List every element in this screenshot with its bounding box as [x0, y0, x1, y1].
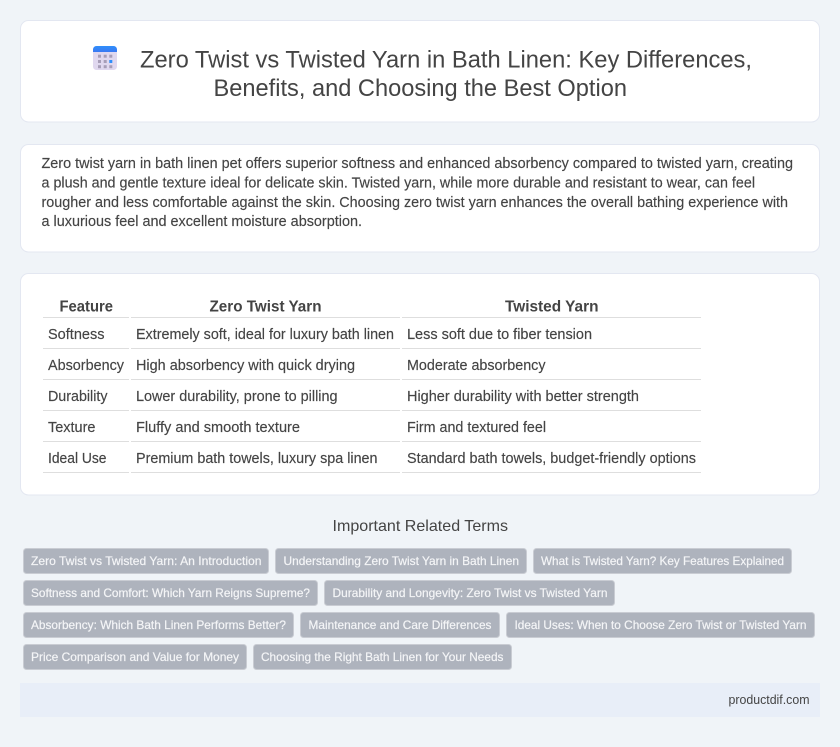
row: durability: Higher durability with better strength	[407, 389, 639, 405]
paragraph text: a plush and gentle texture ideal for delicate skin. Twisted yarn, while more durable and resistant to wear, can feel	[42, 176, 755, 192]
row: ideal use: Standard bath towels, budget-friendly options	[407, 451, 696, 467]
row: ideal use: Premium bath towels, luxury spa linen	[136, 451, 378, 467]
tag	[24, 612, 294, 638]
row: ideal use: Ideal Use	[48, 451, 106, 467]
tag	[24, 580, 318, 606]
table header: Twisted Yarn	[505, 298, 598, 316]
tag: Understanding Zero Twist Yarn in Bath Linen	[284, 554, 519, 568]
table header: Feature	[60, 298, 113, 316]
table header	[43, 298, 701, 318]
tag: Choosing the Right Bath Linen for Your Needs	[261, 650, 504, 664]
tag	[324, 580, 614, 606]
row: absorbency	[43, 358, 701, 380]
tag	[534, 548, 792, 574]
tag: Zero Twist vs Twisted Yarn: An Introduction	[31, 554, 262, 568]
tag	[24, 548, 268, 574]
row: durability	[43, 389, 701, 411]
tag: Maintenance and Care Differences	[308, 618, 492, 632]
icon: calendar	[93, 46, 117, 70]
title: Zero Twist vs Twisted Yarn in Bath Linen: Key Differences,	[140, 46, 752, 74]
tag: Ideal Uses: When to Choose Zero Twist or Twisted Yarn	[514, 618, 806, 632]
header panel	[20, 20, 820, 122]
tag: Price Comparison and Value for Money	[31, 650, 239, 664]
row: absorbency: Absorbency	[48, 358, 125, 374]
tag	[300, 612, 500, 638]
paragraph text: rougher and less comfortable against the skin. Choosing zero twist yarn enhances the overall bathing experience with	[42, 195, 788, 211]
row: texture: Texture	[48, 420, 96, 436]
row: absorbency: Moderate absorbency	[407, 358, 546, 374]
paragraph text	[42, 156, 793, 230]
tag	[506, 612, 814, 638]
tag list	[24, 548, 814, 670]
title	[140, 46, 752, 102]
paragraph text: a luxurious feel and excellent moisture absorption.	[42, 214, 362, 230]
tag: What is Twisted Yarn? Key Features Explained	[541, 554, 784, 568]
footer site name: productdif.com	[728, 692, 810, 707]
paragraph text: Zero twist yarn in bath linen pet offers superior softness and enhanced absorbency compared to twisted yarn, creating	[42, 156, 793, 172]
tag: Absorbency: Which Bath Linen Performs Better?	[31, 618, 286, 632]
row: texture	[43, 420, 701, 442]
table header: Zero Twist Yarn	[210, 298, 322, 316]
row: durability: Lower durability, prone to pilling	[136, 389, 338, 405]
heading: important related terms: Important Related Terms	[332, 518, 508, 535]
row: softness: Softness	[48, 327, 104, 343]
tag: Softness and Comfort: Which Yarn Reigns Supreme?	[31, 586, 310, 600]
row: durability: Durability	[48, 389, 108, 405]
footer bar	[20, 683, 820, 717]
row: texture: Firm and textured feel	[407, 420, 546, 436]
tag	[276, 548, 526, 574]
row: softness: Less soft due to fiber tension	[407, 327, 592, 343]
title: Benefits, and Choosing the Best Option	[214, 75, 627, 102]
row: softness: Extremely soft, ideal for luxury bath linen	[136, 327, 394, 343]
row: absorbency: High absorbency with quick drying	[136, 358, 355, 374]
panel: comparison table	[20, 274, 820, 495]
row: ideal use	[43, 451, 701, 473]
tag	[24, 644, 246, 670]
tag: Durability and Longevity: Zero Twist vs Twisted Yarn	[332, 586, 608, 600]
panel: summary paragraph	[20, 144, 820, 252]
row: texture: Fluffy and smooth texture	[136, 420, 300, 436]
row: softness	[43, 327, 701, 349]
tag	[254, 644, 512, 670]
